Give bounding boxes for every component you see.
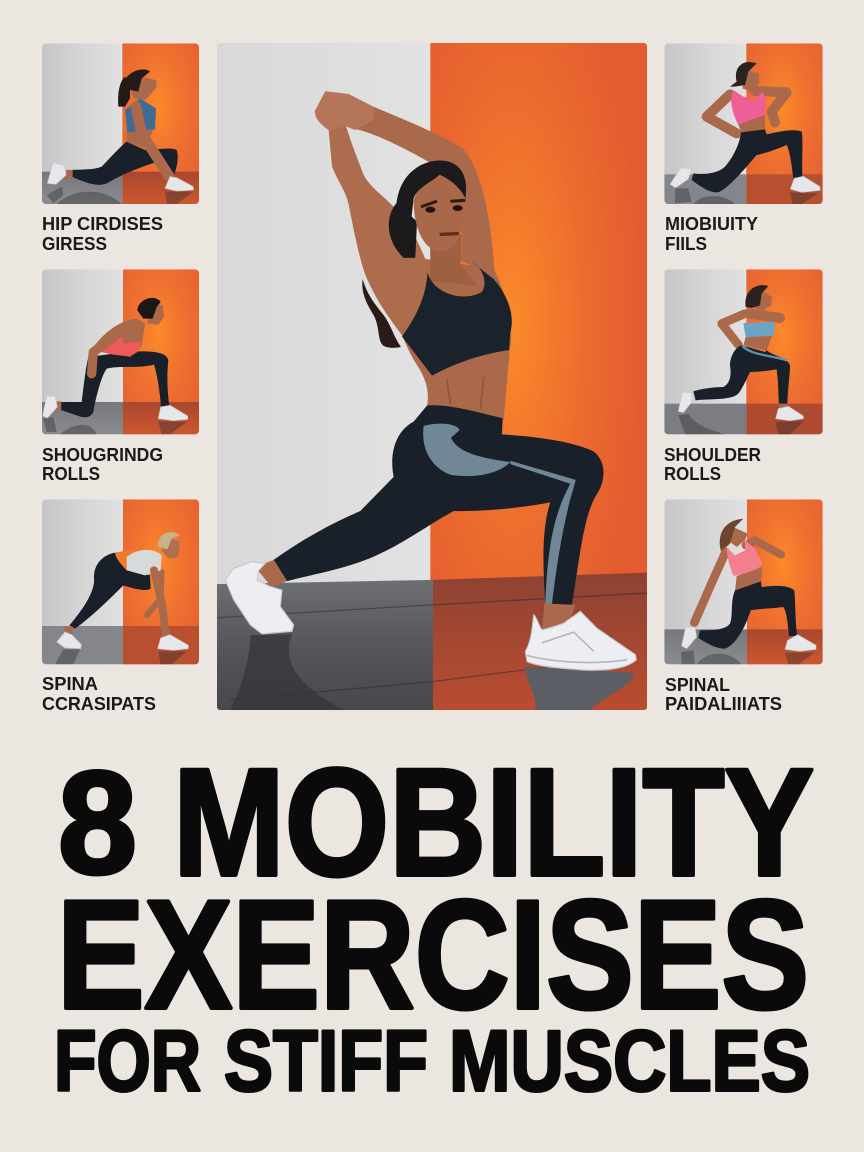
panel: main lunge photo <box>217 43 647 710</box>
label: mobility drills: MIOBIUITY <box>665 214 758 234</box>
label: shoulder grinding rolls: SHOUGRINDG <box>42 445 163 465</box>
label: shoulder rolls: SHOULDER <box>664 445 761 465</box>
label: hip circles: HIP CIRDISES <box>42 214 163 234</box>
label: mobility drills: FIILS <box>665 234 707 254</box>
main figure <box>225 91 636 670</box>
title <box>54 737 814 1110</box>
panel: spinal thumbnail <box>664 499 823 664</box>
panel: spinal crossovers thumbnail <box>42 499 199 664</box>
label: shoulder rolls <box>664 445 761 484</box>
label: shoulder rolls: ROLLS <box>664 464 721 484</box>
panel: shoulder rolls thumbnail <box>664 269 823 434</box>
label: spinal crossovers: CCRASIPATS <box>42 694 156 714</box>
label: spinal crossovers: SPINA <box>42 674 98 694</box>
label: mobility drills <box>665 214 758 254</box>
panel: mobility drills thumbnail <box>664 43 823 204</box>
label: shoulder grinding rolls <box>42 445 163 484</box>
label: spinal: SPINAL <box>665 675 730 695</box>
label: hip circles <box>42 214 163 254</box>
panel: shoulder grinding thumbnail <box>42 269 199 434</box>
panel: hip circles thumbnail <box>42 43 199 204</box>
title: 8 <box>58 741 137 904</box>
title: STIFF <box>224 1014 428 1110</box>
label: hip circles: GIRESS <box>42 234 107 254</box>
label: shoulder grinding rolls: ROLLS <box>42 464 100 484</box>
title: MUSCLES <box>449 1014 810 1110</box>
title: FOR <box>54 1014 201 1110</box>
label: spinal crossovers <box>42 674 156 714</box>
label: spinal <box>665 675 782 714</box>
label: spinal: PAIDALIIIATS <box>665 694 782 714</box>
